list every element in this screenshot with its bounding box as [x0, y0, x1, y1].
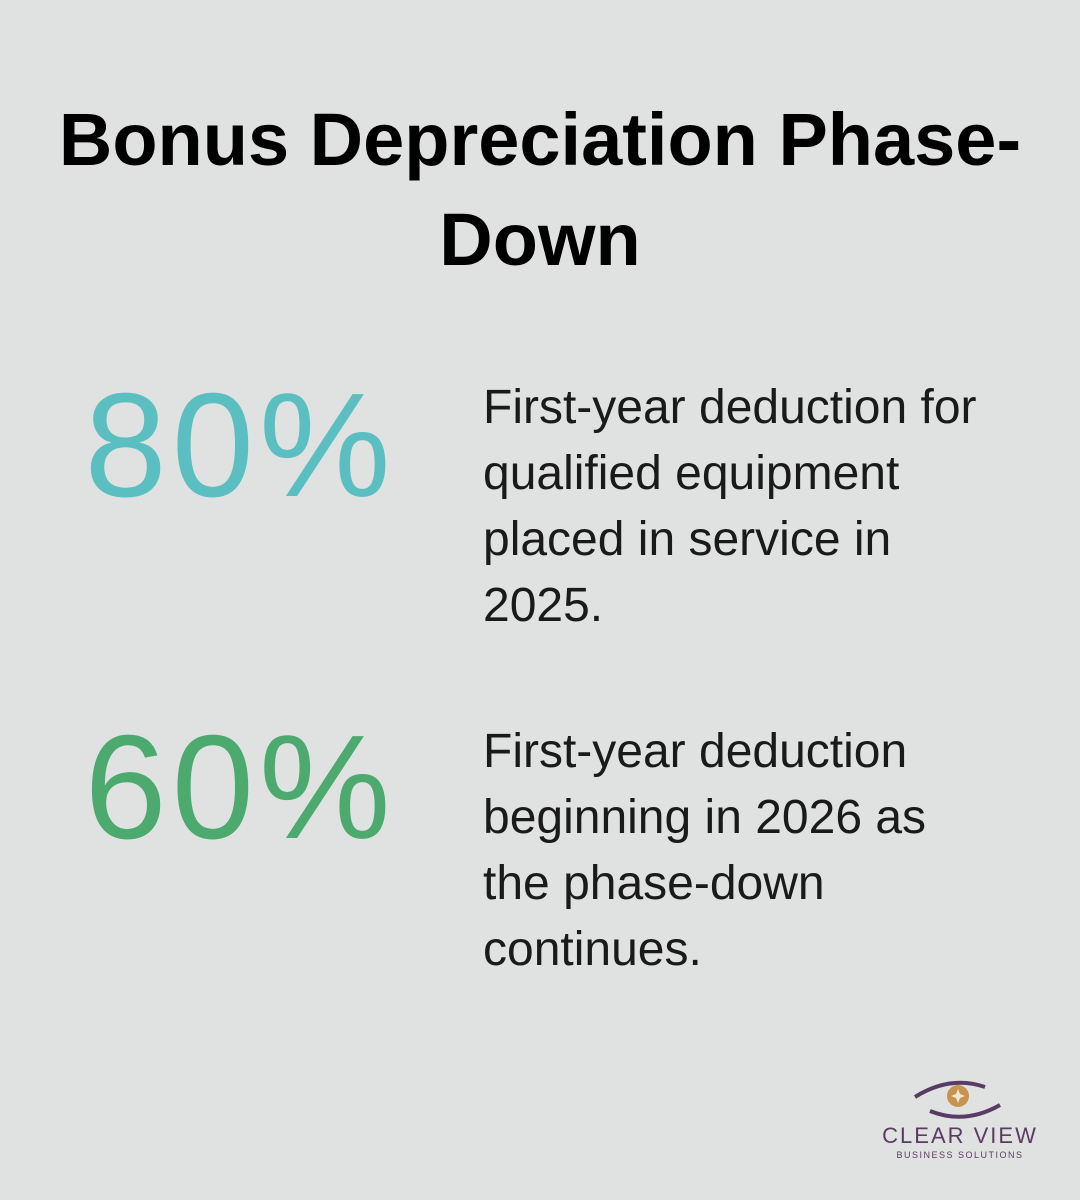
- icon: eye: [914, 1080, 1001, 1119]
- stat: 60%: 60%: [84, 705, 396, 870]
- logo text: [882, 1123, 1038, 1160]
- text: 60% description: beginning in 2026 as: [483, 791, 926, 844]
- text: 80% description: [483, 381, 977, 632]
- logo: [882, 1080, 1038, 1160]
- text: 60% description: continues.: [483, 923, 702, 976]
- text: 80% description: 2025.: [483, 579, 603, 632]
- text: 80% description: qualified equipment: [483, 447, 899, 500]
- text: 80% description: placed in service in: [483, 513, 891, 566]
- stat: 80%: 80%: [84, 363, 396, 528]
- text: 60% description: [483, 725, 926, 976]
- text: 60% description: First-year deduction: [483, 725, 907, 778]
- logo text: BUSINESS SOLUTIONS: [896, 1150, 1024, 1160]
- title: Down: [439, 198, 641, 281]
- title: Bonus Depreciation Phase-: [59, 98, 1021, 181]
- title: [59, 98, 1021, 281]
- text: 80% description: First-year deduction for: [483, 381, 977, 434]
- logo text: CLEAR VIEW: [882, 1123, 1038, 1148]
- text: 60% description: the phase-down: [483, 857, 825, 910]
